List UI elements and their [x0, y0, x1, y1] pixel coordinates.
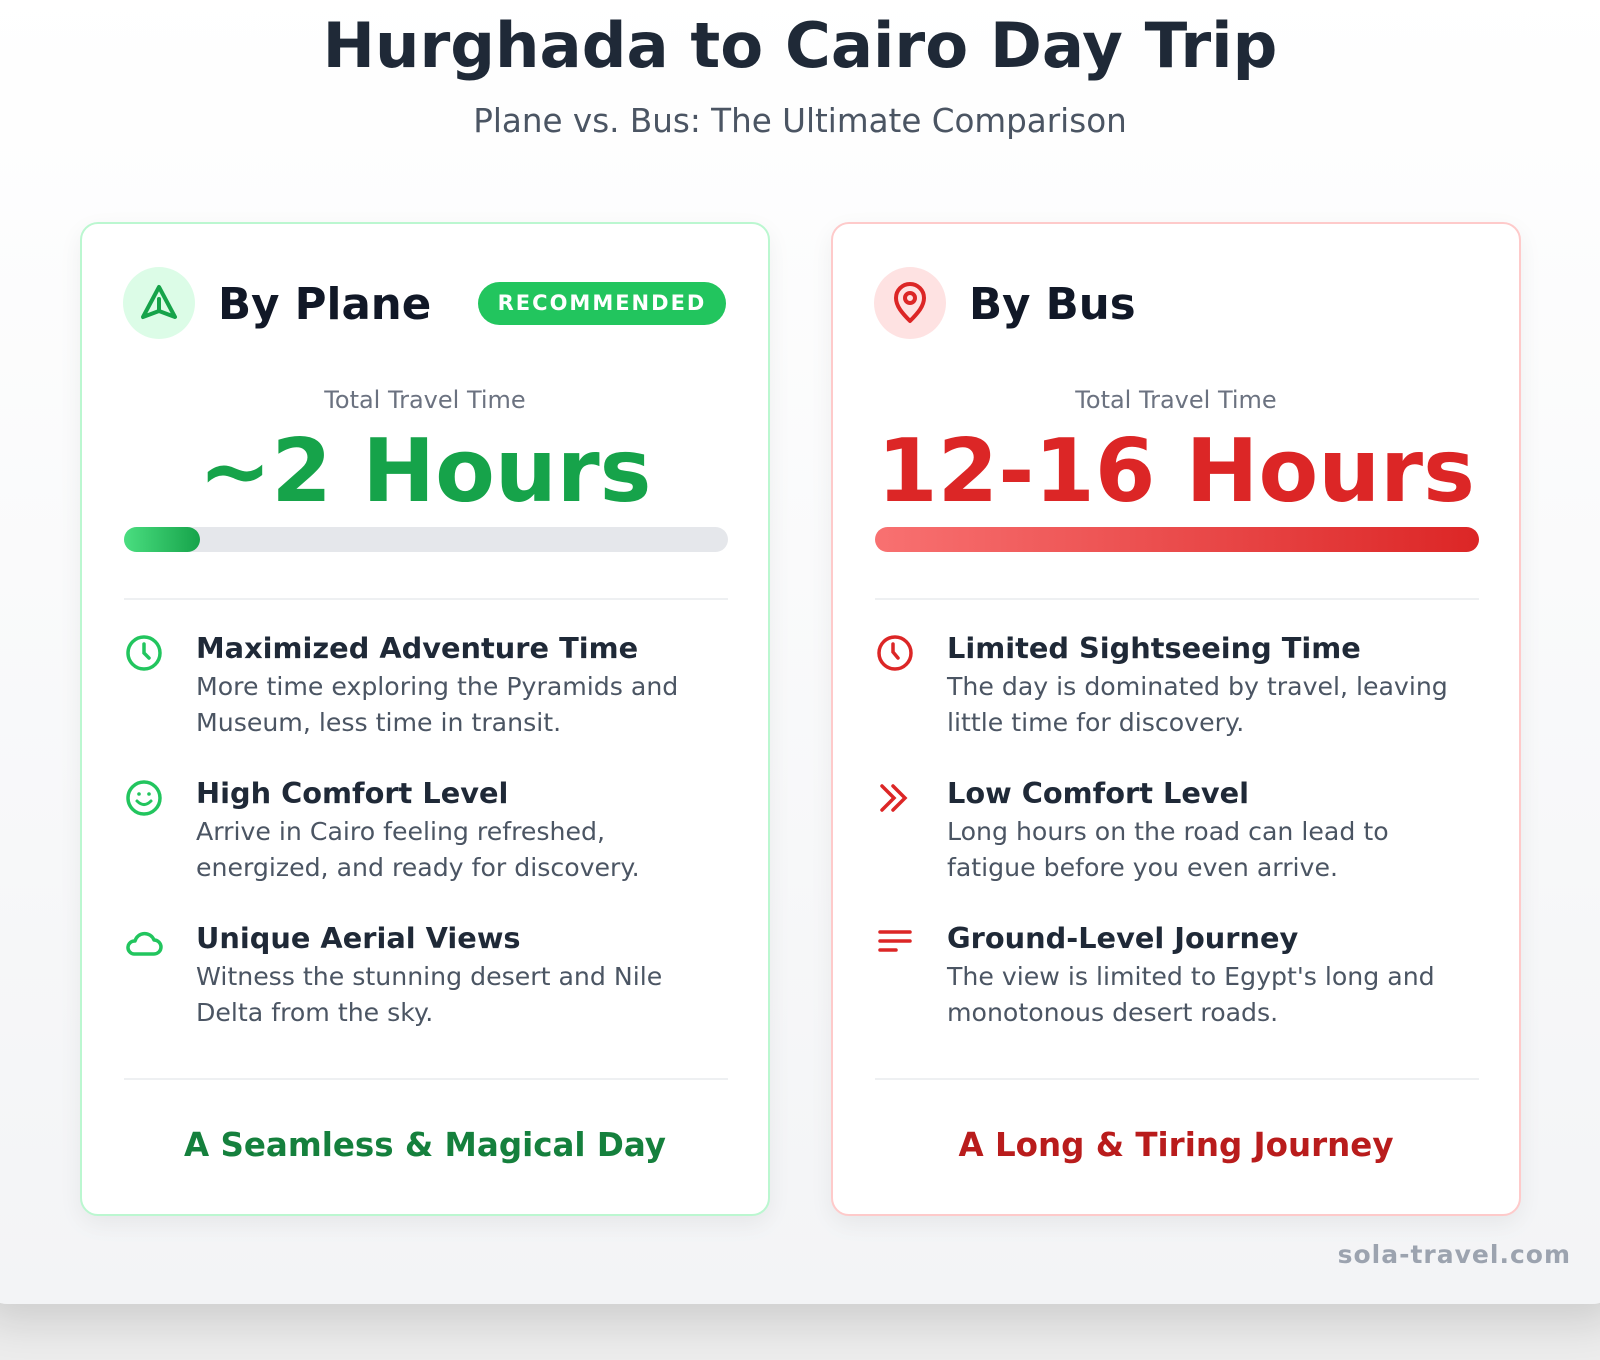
- item 3: The view is limited to Egypt's long and: [947, 962, 1435, 991]
- travel time: Total Travel Time: [1075, 386, 1277, 414]
- item 1: Limited Sightseeing Time: [947, 631, 1361, 665]
- icon: plane: [123, 267, 195, 339]
- item 3: Unique Aerial Views: [196, 921, 521, 955]
- bar: [124, 527, 728, 552]
- item 3: Ground-Level Journey: [947, 921, 1298, 955]
- travel time: Total Travel Time: [324, 386, 526, 414]
- heading: By Bus: [969, 280, 1136, 330]
- subtitle: Plane vs. Bus: The Ultimate Comparison: [473, 102, 1127, 140]
- item 2: energized, and ready for discovery.: [196, 853, 640, 882]
- item 1: The day is dominated by travel, leaving: [947, 672, 1448, 701]
- item 2: [880, 776, 1389, 882]
- heading: By Plane: [218, 280, 431, 330]
- badge: RECOMMENDED: [498, 291, 706, 315]
- item 3: monotonous desert roads.: [947, 998, 1278, 1027]
- item 1: [877, 631, 1448, 737]
- panel: by plane: [80, 222, 770, 1216]
- icon: pin: [874, 267, 946, 339]
- footer: A Long & Tiring Journey: [958, 1126, 1394, 1164]
- footer: A Seamless & Magical Day: [184, 1126, 666, 1164]
- item 1: [126, 631, 678, 737]
- travel time: 12-16 Hours: [877, 420, 1475, 522]
- badge: [478, 282, 726, 325]
- item 3: [126, 921, 662, 1027]
- item 2: High Comfort Level: [196, 776, 508, 810]
- item 3: Witness the stunning desert and Nile: [196, 962, 662, 991]
- item 1: More time exploring the Pyramids and: [196, 672, 678, 701]
- item 2: fatigue before you even arrive.: [947, 853, 1338, 882]
- travel time: ~2 Hours: [199, 420, 651, 522]
- panel: by bus: [831, 222, 1521, 1216]
- item 2: [126, 776, 640, 882]
- item 1: Maximized Adventure Time: [196, 631, 638, 665]
- item 1: little time for discovery.: [947, 708, 1244, 737]
- item 2: Arrive in Cairo feeling refreshed,: [196, 817, 605, 846]
- item 2: Long hours on the road can lead to: [947, 817, 1389, 846]
- bar: [875, 527, 1479, 552]
- item 3: Delta from the sky.: [196, 998, 433, 1027]
- title: Hurghada to Cairo Day Trip: [323, 9, 1277, 82]
- item 3: [878, 921, 1435, 1027]
- item 1: Museum, less time in transit.: [196, 708, 561, 737]
- watermark: sola-travel.com: [1338, 1240, 1571, 1269]
- item 2: Low Comfort Level: [947, 776, 1249, 810]
